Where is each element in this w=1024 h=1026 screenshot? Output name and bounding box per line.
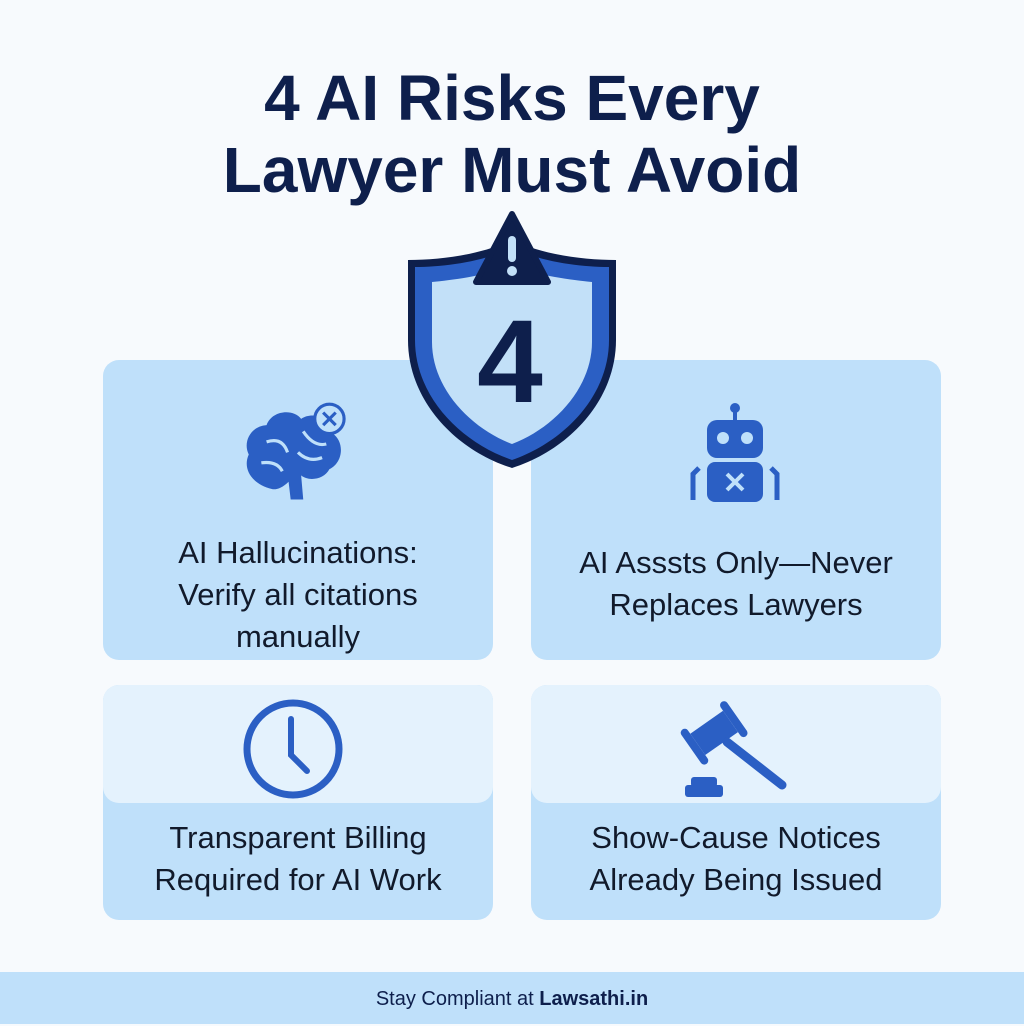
text: Transparent Billing (169, 820, 427, 855)
panel: billing (103, 685, 493, 920)
text (178, 535, 418, 654)
footer (0, 972, 1024, 1024)
text: Show-Cause Notices (591, 820, 881, 855)
text: Verify all citations (178, 577, 418, 612)
text: manually (236, 619, 360, 654)
text: Already Being Issued (590, 862, 882, 897)
icon: brain (246, 402, 346, 500)
footer: Stay Compliant at Lawsathi.in (376, 988, 648, 1010)
panel: hallucinations (103, 360, 493, 660)
text: AI Asssts Only—Never (579, 545, 893, 580)
text (579, 545, 893, 622)
text (590, 820, 882, 897)
icon: shield with 4 (408, 211, 616, 468)
panel: show-cause (531, 685, 941, 920)
icon: gavel (680, 701, 786, 797)
icon: shield with 4: 4 (477, 296, 543, 428)
text (154, 820, 442, 897)
title: 4 AI Risks Every (264, 62, 760, 134)
title (223, 62, 801, 206)
text: Required for AI Work (154, 862, 442, 897)
title: Lawyer Must Avoid (223, 134, 801, 206)
icon: robot (690, 403, 780, 502)
text: AI Hallucinations: (178, 535, 418, 570)
icon: clock (244, 700, 342, 798)
text: Replaces Lawyers (609, 587, 863, 622)
panel: assists (531, 360, 941, 660)
